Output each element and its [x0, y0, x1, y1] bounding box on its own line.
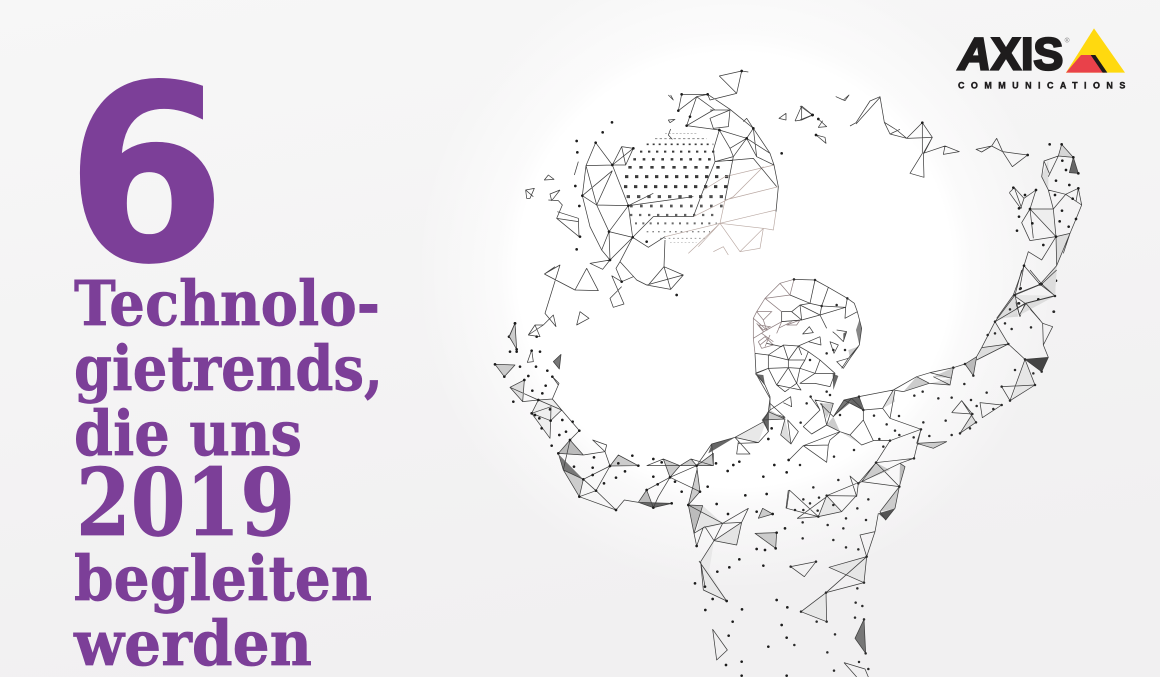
- hand nodes: [812, 115, 1078, 312]
- title: gietrends,: [74, 332, 383, 405]
- title: Technolo-: [74, 267, 380, 340]
- sphere fading mesh: [665, 165, 778, 255]
- title: begleiten: [74, 542, 372, 615]
- hand and fragment lines: [800, 95, 1082, 320]
- left arm nodes: [495, 323, 789, 676]
- sphere mesh: [582, 71, 778, 307]
- sphere nodes: [509, 71, 813, 337]
- network figure: fragments and raised hand: [800, 95, 1082, 320]
- title: [73, 267, 383, 677]
- network figure: sphere: [509, 71, 813, 347]
- body nodes: [791, 279, 1055, 671]
- body shaded facets: [755, 270, 1057, 653]
- logo wordmark: AXIS: [958, 28, 1063, 79]
- left arm lines: [495, 323, 788, 660]
- left arm shaded facets: [495, 323, 785, 601]
- hand shaded facets: [997, 144, 1078, 318]
- network figure: head, chest and right arm: [753, 270, 1057, 677]
- head pink mesh: [753, 279, 802, 353]
- title: 2019: [76, 448, 295, 557]
- big number 6: 6: [66, 33, 226, 318]
- logo registered mark: ®: [1065, 37, 1070, 45]
- network figure: left arm and torso: [495, 323, 789, 676]
- title: die uns: [74, 397, 302, 470]
- logo triangle: [1066, 28, 1125, 73]
- sphere fragments: [509, 323, 516, 347]
- logo tagline: COMMUNICATIONS: [958, 80, 1125, 90]
- sphere dot grid: [624, 133, 733, 243]
- logo: Axis Communications: [958, 28, 1125, 90]
- head and body lines: [755, 270, 1057, 677]
